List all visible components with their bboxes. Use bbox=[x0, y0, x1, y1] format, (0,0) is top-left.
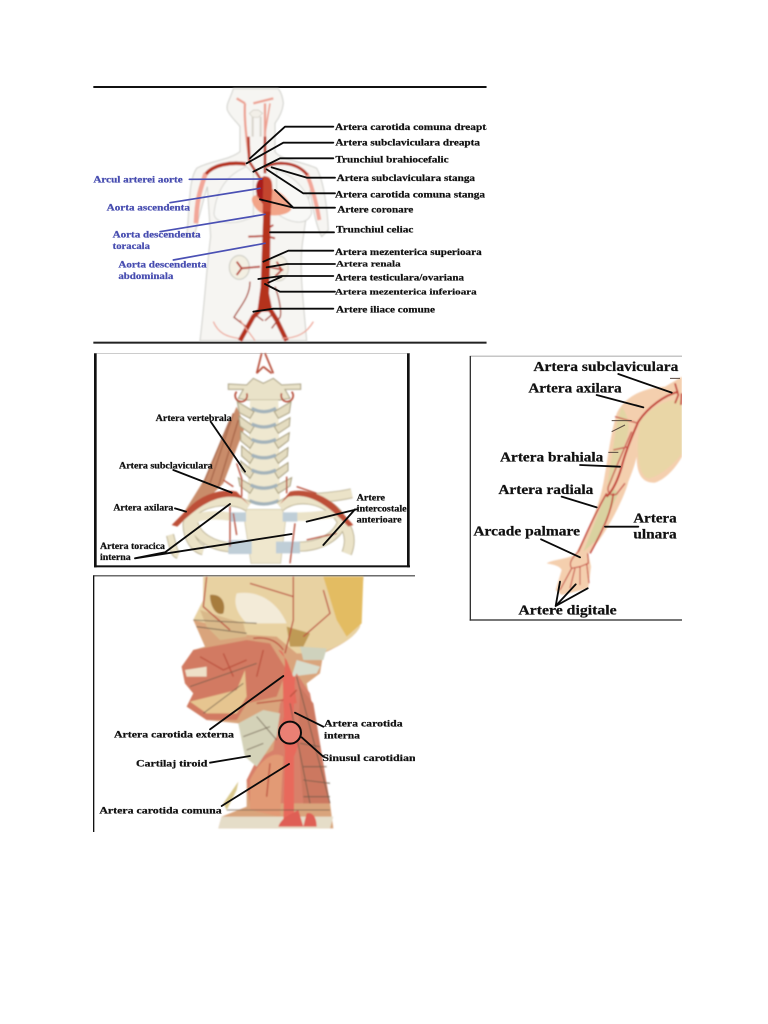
left blue labels: toracala bbox=[113, 241, 150, 252]
right labels: Artere coronare bbox=[337, 204, 414, 215]
right labels: Trunchiul brahiocefalic bbox=[335, 155, 449, 166]
labels: Artera axilara bbox=[528, 381, 622, 396]
labels: Artera subclaviculara bbox=[533, 359, 679, 374]
labels: Artera carotida bbox=[324, 719, 403, 730]
right labels: Trunchiul celiac bbox=[336, 224, 414, 235]
labels: Artera carotida externa bbox=[114, 730, 234, 741]
right labels: Artera renala bbox=[336, 259, 402, 269]
labels bbox=[100, 413, 407, 562]
illustration: human torso with aorta bbox=[187, 89, 328, 341]
top rule bbox=[93, 86, 487, 88]
labels: anterioare bbox=[357, 515, 402, 525]
labels: Sinusul carotidian bbox=[322, 753, 416, 764]
labels: Artera toracica bbox=[100, 541, 166, 551]
labels: Artera subclaviculara bbox=[119, 460, 213, 470]
labels: intercostale bbox=[357, 504, 407, 514]
panel: arm arteries bbox=[470, 356, 682, 621]
right labels: Artera testiculara/ovariana bbox=[335, 273, 464, 284]
left blue labels: Arcul arterei aorte bbox=[93, 175, 183, 186]
panel: systemic arteries of the trunk bbox=[93, 86, 492, 344]
labels bbox=[99, 719, 416, 816]
labels: Artera vertebrala bbox=[156, 413, 232, 423]
left blue labels: abdominala bbox=[118, 271, 174, 282]
blue leader lines bbox=[160, 179, 265, 260]
labels: Artere bbox=[357, 493, 385, 503]
right labels: Artera subclaviculara dreapta bbox=[335, 138, 480, 149]
left blue labels bbox=[93, 175, 207, 282]
labels: Artere digitale bbox=[518, 602, 617, 617]
panel frame bbox=[94, 353, 410, 567]
right labels: Artere iliace comune bbox=[336, 304, 436, 315]
labels: Artera carotida comuna bbox=[99, 805, 222, 816]
right labels: Artera carotida comuna dreapta bbox=[335, 122, 492, 133]
labels: interna bbox=[324, 730, 360, 741]
labels: interna bbox=[100, 552, 131, 562]
panel frame bbox=[470, 356, 682, 621]
labels: Artera bbox=[633, 510, 677, 525]
panel: head and neck arteries bbox=[93, 575, 416, 832]
left blue labels: Aorta descendenta bbox=[113, 230, 201, 241]
illustration: dissected head and neck bbox=[182, 577, 363, 828]
right labels: Artera subclaviculara stanga bbox=[337, 173, 475, 184]
labels: Artera radiala bbox=[498, 482, 594, 497]
leader lines bbox=[135, 422, 357, 558]
labels: Arcade palmare bbox=[473, 524, 580, 539]
labels bbox=[473, 359, 679, 617]
black leader lines bbox=[247, 127, 335, 312]
left blue labels: Aorta ascendenta bbox=[107, 203, 190, 214]
illustration: arm with arteries bbox=[547, 377, 682, 595]
carotid sinus circle bbox=[279, 722, 301, 744]
labels: ulnara bbox=[633, 527, 677, 542]
labels: Artera axilara bbox=[113, 503, 174, 513]
labels: Cartilaj tiroid bbox=[136, 759, 208, 770]
thin inner leader ticks bbox=[608, 378, 680, 452]
leader lines bbox=[541, 374, 672, 606]
leader lines bbox=[210, 676, 323, 806]
panel frame bbox=[93, 575, 415, 832]
bottom rule bbox=[93, 342, 487, 344]
illustration: cervical spine, ribs and arteries bbox=[170, 353, 353, 563]
right labels: Artera mezenterica superioara bbox=[335, 247, 482, 258]
right labels bbox=[335, 122, 492, 315]
panel: neck and thorax arteries bbox=[94, 353, 410, 567]
right labels: Artera mezenterica inferioara bbox=[335, 286, 478, 296]
labels: Artera brahiala bbox=[500, 450, 604, 465]
right labels: Artera carotida comuna stanga bbox=[335, 190, 485, 201]
left blue labels: Aorta descendenta bbox=[118, 260, 207, 271]
